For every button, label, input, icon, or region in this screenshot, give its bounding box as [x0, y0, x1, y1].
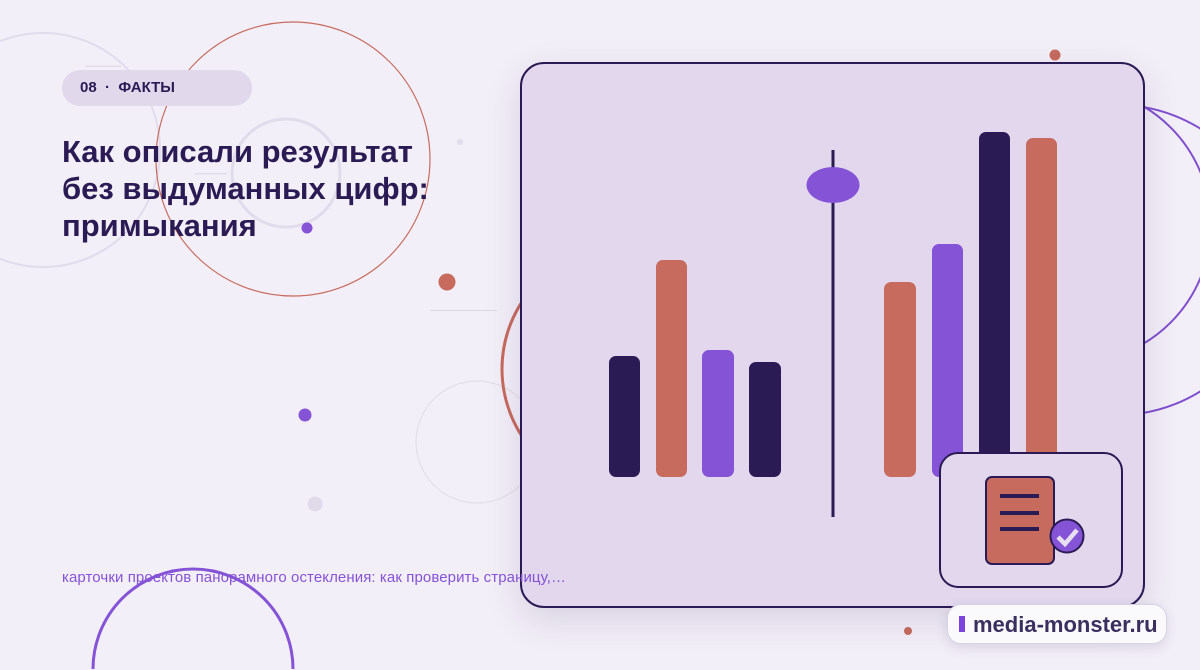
left bars	[609, 260, 781, 477]
brand badge	[947, 604, 1167, 644]
divider with marker	[806, 150, 860, 517]
subtitle text: карточки проектов панорамного остекления: как проверить страницу,…	[62, 569, 566, 586]
inset card with document icon	[940, 453, 1122, 587]
panel: illustration card	[520, 62, 1145, 608]
title	[62, 134, 429, 243]
category pill: 08 · ФАКТЫ	[80, 79, 175, 96]
title: без выдуманных цифр:	[62, 171, 429, 206]
brand marker	[959, 616, 965, 632]
category pill	[62, 70, 252, 106]
brand name: media-monster.ru	[973, 612, 1158, 637]
right bars	[884, 132, 1057, 477]
title: примыкания	[62, 208, 257, 243]
title: Как описали результат	[62, 134, 413, 169]
